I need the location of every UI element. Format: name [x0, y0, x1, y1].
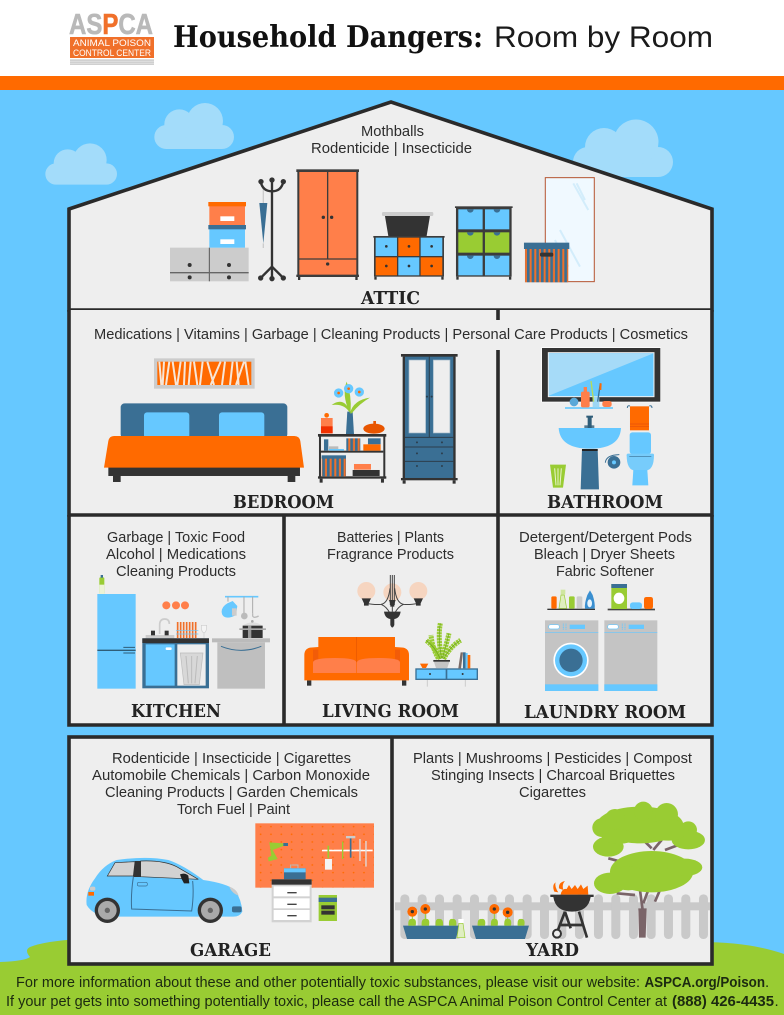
panel: yard	[392, 737, 712, 964]
shelf left with bottles	[547, 590, 595, 610]
attic substances text: Mothballs	[361, 124, 424, 140]
yard substances text: Plants | Mushrooms | Pesticides | Compost	[413, 751, 692, 767]
orange sofa	[304, 637, 409, 686]
laundry illustration	[545, 584, 657, 691]
lidded dish	[363, 421, 385, 434]
side table with plant	[415, 623, 478, 687]
stove counter	[212, 638, 270, 689]
yard substances text: Cigarettes	[519, 785, 586, 801]
living room illustration	[304, 575, 478, 687]
umbrella	[259, 187, 267, 248]
washer	[545, 620, 598, 691]
kitchen illustration	[97, 575, 270, 689]
toilet paper roll	[605, 455, 620, 469]
panel: laundry room	[498, 515, 713, 725]
kitchen label: KITCHEN	[131, 702, 221, 722]
attic substances text	[311, 124, 472, 157]
pegboard with tools	[255, 823, 374, 888]
laundry substances text: Fabric Softener	[556, 564, 654, 580]
garage substances text: Rodenticide | Insecticide | Cigarettes	[112, 751, 351, 767]
footer note: (888) 426-4435	[672, 993, 774, 1010]
logo: ASPCA Animal Poison Control Center: ANIMAL POISON	[73, 38, 151, 48]
laundry substances text: Detergent/Detergent Pods	[519, 530, 692, 546]
picket fence	[395, 894, 710, 939]
glass door cabinet	[401, 354, 458, 484]
wardrobe	[296, 169, 359, 280]
bedroom label: BEDROOM	[233, 493, 334, 513]
chandelier	[357, 575, 427, 627]
coat stand	[258, 177, 286, 281]
panel: bathroom	[498, 310, 713, 515]
refrigerator with bottle	[97, 575, 136, 689]
title: Household Dangers:	[173, 20, 483, 55]
tree	[592, 802, 705, 938]
striped hamper	[524, 243, 569, 282]
laundry label: LAUNDRY ROOM	[524, 703, 686, 723]
footer note: For more information about these and other potentially toxic substances, please visit our website:	[16, 974, 640, 991]
trash can	[550, 465, 566, 488]
kitchen substances text: Alcohol | Medications	[106, 547, 246, 563]
footer note	[6, 974, 779, 1010]
perfume bottle	[321, 413, 333, 433]
kitchen substances text: Garbage | Toxic Food	[107, 530, 245, 546]
footer note: .	[774, 993, 779, 1010]
tool chest and toolbox	[272, 865, 312, 922]
logo: ASPCA Animal Poison Control Center	[69, 9, 154, 65]
paint can	[319, 895, 337, 921]
grass hills	[0, 939, 784, 1015]
panel: bedroom	[69, 310, 498, 515]
mirror	[542, 348, 661, 402]
bedroom illustration	[104, 354, 458, 484]
toilet	[627, 432, 654, 485]
utensils rail	[222, 597, 259, 619]
attic label: ATTIC	[360, 289, 420, 309]
bed	[104, 403, 304, 482]
panel: living room	[284, 515, 498, 725]
sink counter	[142, 619, 209, 688]
flower planter right	[472, 904, 529, 939]
pot	[239, 620, 266, 638]
logo: ASPCA Animal Poison Control Center: CONTROL CENTER	[73, 48, 151, 58]
header band	[0, 0, 784, 90]
footer note: If your pet gets into something potentially toxic, please call the ASPCA Animal Poison Control Center at	[6, 993, 668, 1010]
living room substances text	[327, 530, 454, 563]
yard substances text: Stinging Insects | Charcoal Briquettes	[431, 768, 675, 784]
footer note: .	[765, 974, 769, 991]
garage substances text: Torch Fuel | Paint	[177, 802, 290, 818]
garage substances text	[92, 751, 370, 818]
living room label: LIVING ROOM	[322, 702, 459, 722]
bathroom illustration	[542, 348, 661, 489]
bedroom and bathroom substances text: Medications | Vitamins | Garbage | Cleaning Products | Personal Care Products | Cosmetics	[94, 327, 688, 343]
shelf right with detergent	[608, 584, 655, 610]
attic furniture	[170, 169, 594, 282]
flower planter left	[403, 904, 460, 939]
clouds	[45, 103, 673, 185]
panel: garage	[69, 737, 392, 964]
garage substances text: Automobile Chemicals | Carbon Monoxide	[92, 768, 370, 784]
spray bottle	[457, 919, 465, 938]
kitchen substances text	[106, 530, 246, 580]
garage substances text: Cleaning Products | Garden Chemicals	[105, 785, 358, 801]
towel	[627, 406, 652, 430]
yard label: YARD	[525, 941, 579, 961]
attic substances text: Rodenticide | Insecticide	[311, 141, 472, 157]
kitchen substances text: Cleaning Products	[116, 564, 236, 580]
laundry substances text	[519, 530, 692, 580]
blue car	[86, 858, 242, 923]
gray drawers	[170, 248, 249, 281]
house walls	[69, 310, 712, 964]
logo: ASPCA Animal Poison Control Center: ASPCA	[69, 9, 153, 41]
vase with flowers	[332, 382, 370, 434]
basket on cabinet	[382, 212, 433, 236]
garage illustration	[86, 823, 374, 923]
living room substances text: Batteries | Plants	[337, 530, 444, 546]
title: Room by Room	[494, 21, 713, 54]
yard illustration	[395, 802, 710, 939]
title	[173, 20, 713, 55]
bathroom label: BATHROOM	[547, 493, 663, 513]
hanging flowers	[162, 601, 189, 609]
standing mirror	[545, 178, 594, 282]
bookcase with items	[318, 434, 386, 483]
storage boxes	[208, 202, 246, 248]
living room substances text: Fragrance Products	[327, 547, 454, 563]
dryer	[604, 620, 657, 691]
yard substances text	[413, 751, 692, 801]
garage label: GARAGE	[190, 941, 271, 961]
shelf with toiletries	[565, 381, 613, 409]
charcoal grill	[550, 881, 594, 938]
sink	[559, 416, 621, 489]
panel: kitchen	[69, 515, 284, 725]
panel: attic	[69, 102, 712, 310]
laundry substances text: Bleach | Dryer Sheets	[534, 547, 675, 563]
footer note: ASPCA.org/Poison	[644, 974, 765, 991]
colored drawer cabinet	[373, 236, 445, 280]
cube storage shelves	[455, 206, 513, 280]
wall picture	[154, 358, 255, 389]
